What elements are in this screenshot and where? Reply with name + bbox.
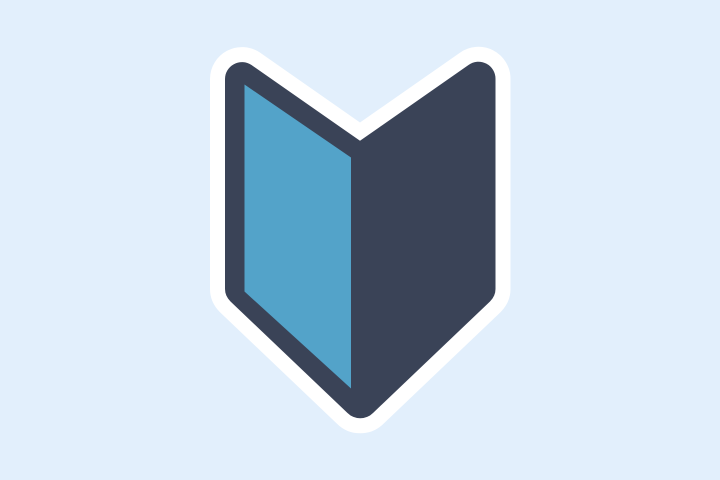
badge blue left panel [244, 84, 351, 388]
badge dark body [225, 62, 496, 418]
badge white sticker outline [225, 62, 496, 418]
icon: beginner shield badge [225, 62, 496, 418]
